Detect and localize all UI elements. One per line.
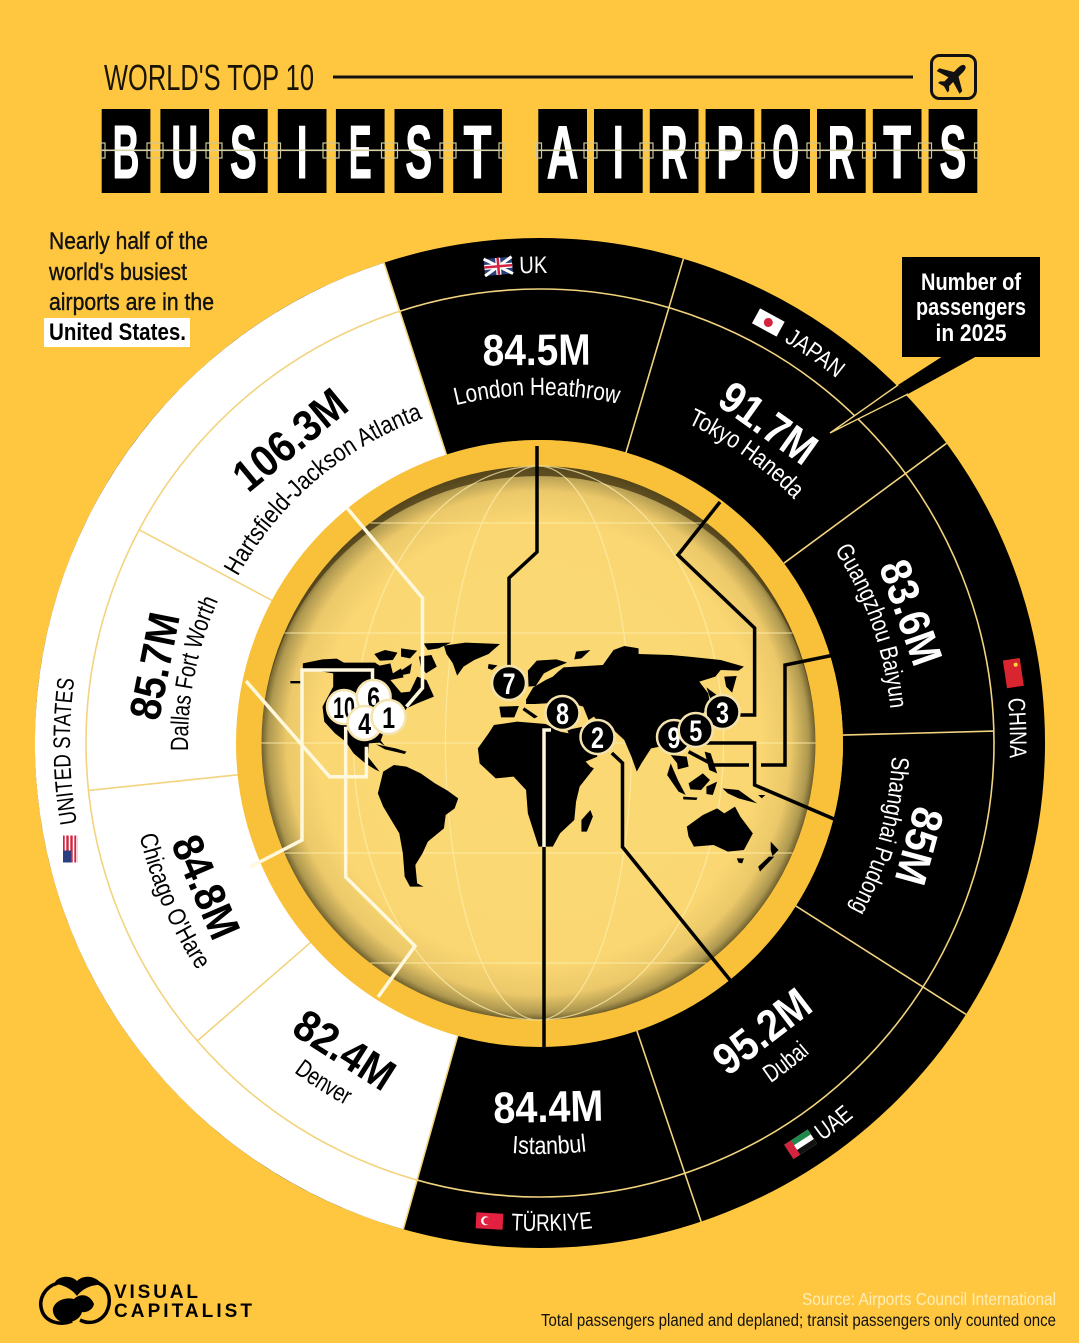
value: Istanbul: 84.4M: [493, 1082, 604, 1133]
markers: airport ranks: 9: [668, 722, 680, 755]
Greenland: [444, 643, 500, 676]
logo: Visual Capitalist: CAPITALIST: [114, 1301, 252, 1322]
ring dividers: [86, 259, 994, 1229]
markers: airport ranks: 2: [591, 722, 604, 755]
country label: Japan: JAPAN: [786, 329, 846, 378]
value: Shanghai Pudong: 85M: [885, 802, 953, 890]
callout: number of passengers: passengers: [916, 294, 1026, 321]
Kamchatka and Japan: [706, 676, 737, 699]
black segments ring: [136, 339, 944, 1147]
markers: airport ranks: 1: [382, 702, 395, 735]
South America: [378, 765, 458, 887]
value: Tokyo Haneda: Tokyo Haneda: [692, 408, 802, 500]
value: Denver: 82.4M: [285, 1000, 404, 1101]
country label: UAE: [784, 1104, 854, 1159]
callout: number of passengers: in 2025: [936, 320, 1006, 347]
title: busiest airports flipboard: I: [613, 110, 624, 194]
value: Dubai: 95.2M: [704, 979, 821, 1085]
callout: number of passengers: [830, 257, 1040, 433]
Australia: [687, 807, 753, 863]
title: busiest airports flipboard: P: [716, 110, 743, 194]
icon: airplane: [931, 54, 976, 99]
text block: intro note: United States.: [49, 319, 186, 346]
value: London Heathrow: London Heathrow: [454, 378, 621, 405]
country label: Japan: [752, 308, 846, 378]
value: Dallas Fort Worth: Dallas Fort Worth: [170, 597, 218, 750]
value: Dallas Fort Worth: [121, 597, 218, 750]
Arabian peninsula: [567, 727, 597, 763]
value: Tokyo Haneda: 91.7M: [710, 372, 826, 475]
markers: airport ranks: 6: [367, 682, 380, 715]
markers: airport ranks: 10: [333, 692, 355, 725]
title: busiest airports flipboard: O: [772, 110, 799, 194]
title: busiest airports flipboard: S: [405, 110, 432, 194]
title: busiest airports flipboard: U: [171, 110, 198, 194]
text block: intro note: [44, 228, 214, 347]
title: busiest airports flipboard: S: [230, 110, 257, 194]
value: Hartsfield-Jackson Atlanta: 106.3M: [223, 379, 357, 501]
title: busiest airports flipboard: T: [883, 110, 911, 194]
white segments: United States: [35, 263, 458, 1229]
Eurasia: [526, 646, 744, 772]
heading: world's top 10: WORLD'S TOP 10: [104, 57, 314, 98]
country label: China: [1002, 658, 1026, 758]
panel: globe: [246, 446, 834, 1047]
logo: Visual Capitalist: VISUAL: [114, 1282, 198, 1303]
markers: airport ranks: 3: [716, 697, 729, 730]
Arctic islands: [374, 643, 451, 675]
Madagascar: [581, 810, 593, 832]
value: Guangzhou Baiyun: Guangzhou Baiyun: [837, 544, 904, 708]
country label: UK: UK: [520, 256, 547, 274]
callout: number of passengers: Number of: [921, 269, 1022, 296]
Southeast Asia: [667, 752, 717, 800]
country label: Turkiye: TÜRKIYE: [512, 1210, 592, 1232]
value: Hartsfield-Jackson Atlanta: Hartsfield-Jackson Atlanta: [224, 408, 423, 576]
connector lines: black: [509, 446, 834, 1047]
value: Shanghai Pudong: [848, 758, 953, 914]
New Zealand: [758, 842, 779, 872]
country label: UK: [483, 255, 547, 278]
panel: circular ring of airports: [34, 238, 1045, 1248]
markers: airport ranks: [327, 666, 740, 755]
value: Chicago O'Hare: 84.8M: [161, 828, 249, 946]
source note: [541, 1289, 1056, 1330]
text block: intro note: airports are in the: [49, 289, 214, 316]
value: Guangzhou Baiyun: 83.6M: [869, 554, 951, 672]
value: Dubai: Dubai: [762, 1040, 809, 1082]
country label: UAE: UAE: [814, 1104, 854, 1138]
title: busiest airports flipboard: [100, 109, 980, 194]
text block: intro note: Nearly half of the: [49, 228, 208, 255]
title: busiest airports flipboard: E: [349, 110, 372, 194]
Scandinavia: [528, 650, 590, 687]
Cuba and Caribbean: [376, 744, 406, 754]
country label: United States: UNITED STATES: [53, 678, 76, 824]
title: busiest airports flipboard: B: [112, 110, 140, 194]
country label: Turkiye: [476, 1210, 592, 1232]
value: Istanbul: [493, 1082, 604, 1154]
country label: United States: [53, 678, 78, 862]
markers: airport ranks: 4: [358, 708, 371, 741]
Iberia and Italy: [499, 706, 538, 718]
connector lines: white: [246, 508, 551, 997]
Iceland: [488, 664, 497, 670]
heading: world's top 10: [104, 57, 913, 98]
title: busiest airports flipboard: I: [297, 110, 308, 194]
value: Denver: Denver: [295, 1059, 352, 1104]
markers: airport ranks: 5: [689, 715, 702, 748]
North America: [290, 659, 434, 772]
value: Chicago O'Hare: Chicago O'Hare: [140, 834, 207, 968]
country label: China: CHINA: [1008, 698, 1026, 758]
title: busiest airports flipboard: R: [661, 110, 688, 194]
title: busiest airports flipboard: S: [939, 110, 966, 194]
title: busiest airports flipboard: R: [828, 110, 855, 194]
Africa: [478, 722, 594, 847]
markers: airport ranks: 8: [556, 698, 569, 731]
value: Guangzhou Baiyun: [837, 544, 951, 708]
value: Istanbul: Istanbul: [514, 1134, 586, 1154]
value: Shanghai Pudong: Shanghai Pudong: [848, 758, 909, 914]
inner yellow ring: [250, 454, 830, 1034]
title: busiest airports flipboard: A: [547, 110, 579, 194]
value: Dallas Fort Worth: 85.7M: [121, 608, 190, 724]
title: busiest airports flipboard: T: [464, 110, 492, 194]
value: London Heathrow: [454, 326, 621, 405]
markers: airport ranks: 7: [502, 668, 516, 701]
text block: intro note: world's busiest: [48, 259, 187, 286]
New Guinea: [722, 788, 765, 803]
value: London Heathrow: 84.5M: [482, 326, 591, 375]
logo: Visual Capitalist: [41, 1277, 252, 1323]
map: world landmasses: [290, 643, 779, 887]
